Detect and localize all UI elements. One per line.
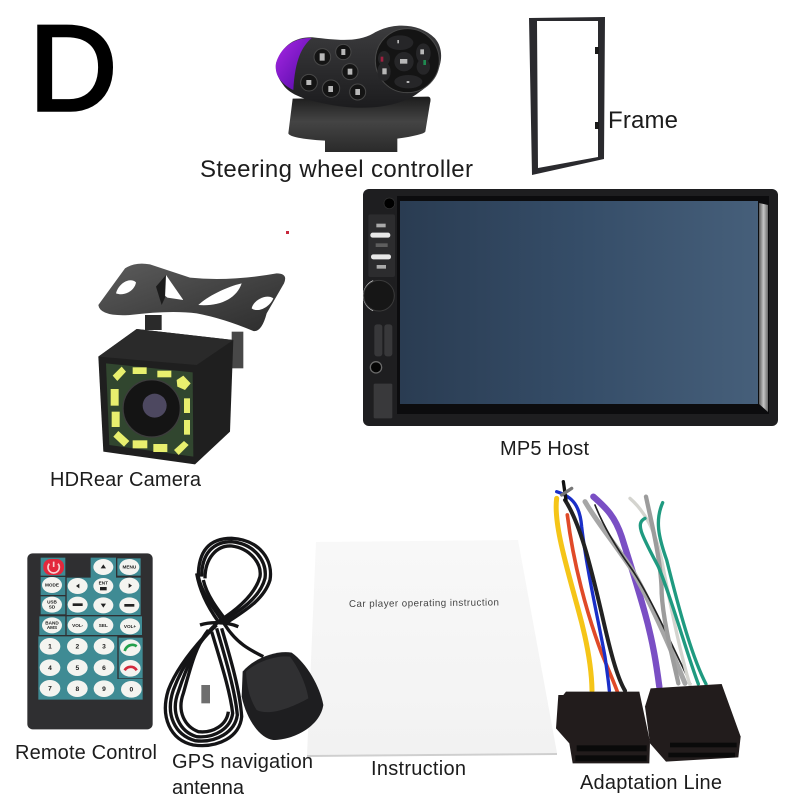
label: GPS navigation antenna [172,751,313,799]
label: adaptation line: Adaptation Line [580,772,722,794]
MP5 host unit [363,189,778,426]
booklet title: Car player operating instruction [349,597,499,610]
key names: MODE [45,583,59,588]
remote control [27,553,153,729]
housing top face [98,329,233,365]
right connector [645,684,741,762]
frame clips [595,47,599,129]
booklet bottom edge [307,753,557,757]
chrome strip [759,203,768,412]
connector pins [575,743,737,761]
key numbers [48,644,133,694]
label: HD rear camera: HDRear Camera [50,469,202,491]
key names: BAND [45,620,59,625]
key numbers: 8 [75,686,79,693]
key numbers: 4 [48,665,52,672]
adaptation line wires [556,482,741,763]
antenna puck [242,652,323,740]
key names: ENT [99,580,108,585]
label: instruction: Instruction [371,758,466,780]
skip next [377,265,386,269]
camera housing [98,329,233,464]
volume knob rim [364,281,373,310]
usb cover [374,384,392,418]
volume knob [364,280,394,311]
key numbers: 6 [102,665,106,672]
key numbers: 2 [75,644,79,651]
heading: variant letter: D [29,0,117,136]
key names: AMS [47,625,57,630]
rear camera [98,264,285,464]
key names: USB [47,600,58,605]
power key [43,559,64,575]
frame [529,17,605,175]
cable connector [201,685,210,703]
key numbers: 1 [48,644,52,651]
purple light [276,38,312,90]
label: steering wheel controller: Steering wheel controller [200,156,473,183]
left wire bundle [556,482,625,692]
steering wheel controller [276,26,441,152]
plate holes [116,275,273,310]
label: GPS navigation antenna: antenna [172,777,245,799]
camera stem [145,315,162,330]
mounting plate [98,264,285,331]
key numbers: 5 [75,665,79,672]
controller clamp base [288,97,431,152]
LED board [106,363,193,457]
aux jack [370,362,382,373]
host screen [400,201,758,404]
controller buttons [301,29,439,100]
coiled cable [165,538,271,746]
key names: VOL- [72,623,84,628]
left connector [556,692,650,763]
booklet page [307,540,557,755]
plate triangle [156,275,166,305]
frame border [529,17,605,175]
d-pad segments [377,35,431,88]
right wire bundle [585,497,706,687]
call key marks [381,57,426,65]
key panels [38,558,143,700]
arrow key marks [73,564,134,608]
key numbers: 7 [48,686,52,693]
key names: SD [49,604,56,609]
key names: VOL+ [124,624,136,629]
white button separators [370,233,391,259]
label: frame: Frame [608,107,678,134]
button panel [368,214,395,277]
key numbers: 3 [102,644,106,651]
button marks [306,40,424,95]
mode button [376,243,388,247]
skip previous [376,224,386,227]
lens [123,380,180,437]
instruction booklet [307,540,557,757]
host body [363,189,778,426]
label: remote control: Remote Control [15,742,157,764]
key names: SEL [99,623,108,628]
mic hole [384,198,395,209]
label: MP5 host: MP5 Host [500,438,589,460]
phone keys [125,645,137,670]
key names: MENU [122,565,137,570]
power symbol [48,562,59,573]
card slots [374,324,392,356]
host screen bezel [397,196,769,414]
stray red speck [286,231,289,234]
controller body [276,26,441,108]
host left controls [364,198,395,418]
key names [45,565,137,630]
white keys [40,559,142,698]
LED ring [111,367,191,455]
puck top highlight [246,656,308,712]
side bracket [232,332,243,368]
lens glass [143,394,167,418]
label: GPS navigation antenna: GPS navigation [172,751,313,773]
remote body [27,553,153,729]
key numbers: 9 [102,686,106,693]
GPS antenna [165,538,323,746]
key numbers: 0 [129,687,133,694]
